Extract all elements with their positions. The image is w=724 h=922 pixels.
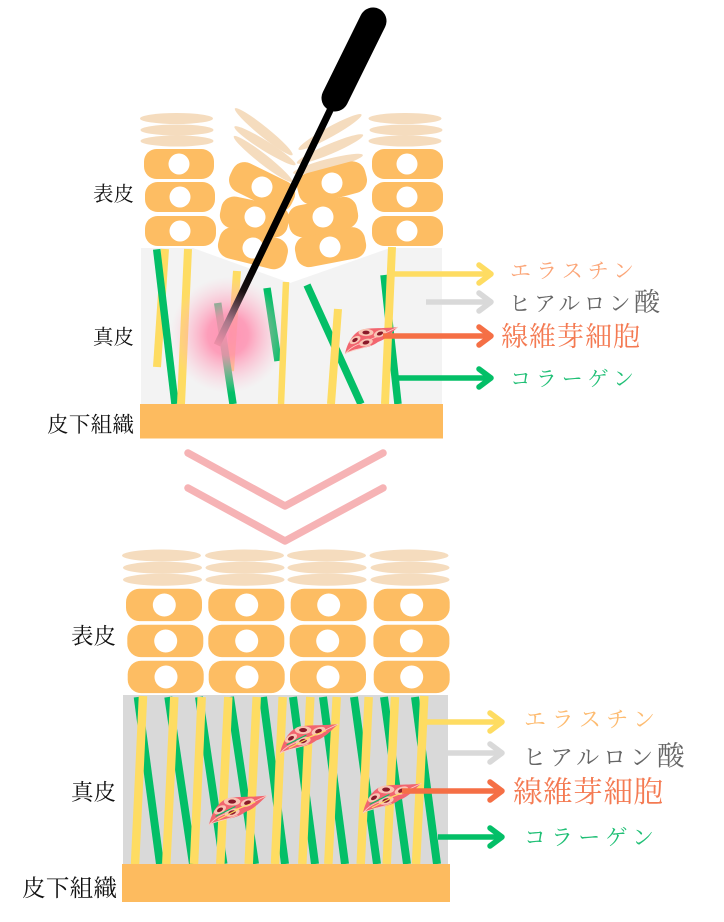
arrow: hyaluronic acid (top) xyxy=(426,293,491,311)
label: epidermis (bottom): 表皮 xyxy=(71,624,116,649)
label: dermis (bottom): 真皮 xyxy=(71,780,116,805)
label: elastin (bottom): エラスチン xyxy=(524,707,655,732)
label: elastin (top): エラスチン xyxy=(510,259,634,283)
epidermis cells (bottom) xyxy=(126,589,450,693)
label: hyaluronic acid (top): ヒアルロン酸 xyxy=(509,288,660,317)
label: hyaluronic acid (bottom): ヒアルロン酸 xyxy=(523,740,685,771)
subcutaneous tissue (top) xyxy=(140,404,443,438)
fibroblast B (bottom) xyxy=(280,724,338,754)
dermis background (bottom) xyxy=(123,695,448,864)
dermis background (top) xyxy=(141,248,442,404)
label: fibroblast (top): 線維芽細胞 xyxy=(501,322,640,352)
panel: skin after treatment xyxy=(122,550,450,902)
label: dermis (top): 真皮 xyxy=(93,326,134,349)
laser glow xyxy=(170,277,286,393)
lifted stratum corneum flakes (top) xyxy=(231,105,365,186)
arrow: fibroblast (bottom) xyxy=(402,782,502,800)
collagen fibres (bottom) xyxy=(138,697,437,864)
arrow: hyaluronic acid (bottom) xyxy=(448,744,502,762)
arrow: collagen (bottom) xyxy=(438,828,502,846)
fibroblast A (bottom) xyxy=(209,796,267,825)
label: fibroblast (bottom): 線維芽細胞 xyxy=(513,776,663,809)
subcutaneous tissue (bottom) xyxy=(122,864,450,902)
label: subcutaneous tissue (bottom): 皮下組織 xyxy=(22,875,117,902)
double chevron arrow xyxy=(188,453,383,541)
label: subcutaneous tissue (top): 皮下組織 xyxy=(47,413,134,437)
fibroblast (top) xyxy=(345,327,398,354)
arrow: fibroblast (top) xyxy=(383,327,491,345)
collagen and elastin fibres (top) xyxy=(157,247,398,404)
flat stratum corneum flakes (top) xyxy=(140,113,442,146)
epidermis cells, right column (top) xyxy=(372,149,443,246)
arrow: collagen (top) xyxy=(398,369,491,387)
needle xyxy=(217,21,373,345)
elastin fibres (bottom) xyxy=(135,696,424,865)
label: epidermis (top): 表皮 xyxy=(93,183,134,206)
arrow: elastin (top) xyxy=(392,265,491,283)
label: collagen (bottom): コラーゲン xyxy=(524,825,654,850)
label: collagen (top): コラーゲン xyxy=(510,367,634,391)
epidermis cells, tilted around the needle (top) xyxy=(215,158,370,272)
epidermis cells, left column (top) xyxy=(144,149,216,246)
stratum corneum flakes (bottom) xyxy=(122,550,450,586)
arrow: elastin (bottom) xyxy=(423,713,502,731)
panel: skin before treatment xyxy=(140,21,443,438)
fibroblast C (bottom) xyxy=(363,784,421,813)
